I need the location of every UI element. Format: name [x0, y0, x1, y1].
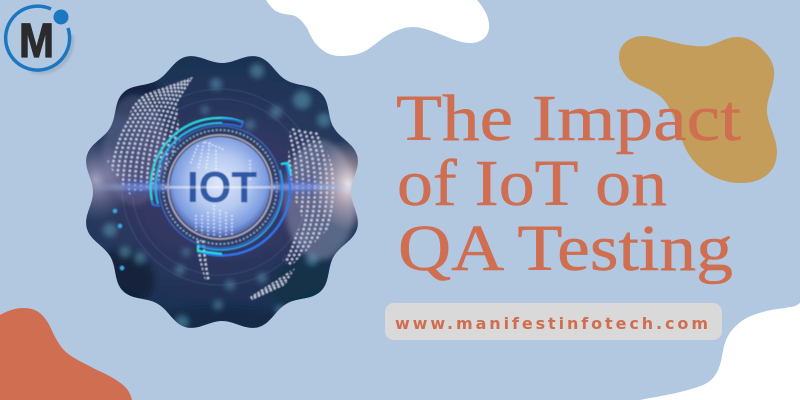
title line 2: of IoT on [397, 147, 667, 220]
website pill [385, 303, 722, 340]
inner rings [159, 126, 281, 248]
website url: www.manifestinfotech.com [395, 314, 708, 333]
core dotted map [190, 142, 250, 240]
faint orbit rings [122, 89, 318, 285]
bokeh lights [103, 64, 331, 329]
badge: IoT globe image [86, 56, 358, 328]
logo letter M: M [19, 15, 54, 68]
logo ring [6, 6, 70, 70]
white blob: bottom right [640, 303, 800, 400]
core sphere [170, 137, 270, 237]
network nodes [113, 209, 124, 270]
badge dark corners [106, 82, 332, 327]
dotted world map [107, 76, 334, 301]
title [396, 82, 741, 285]
horizontal light flare [90, 184, 360, 190]
badge background [86, 56, 358, 328]
flare across core [165, 186, 275, 188]
ochre blob: top right [619, 36, 777, 183]
side glows [316, 142, 358, 228]
logo dot [54, 10, 68, 24]
orange blob: bottom left [0, 308, 132, 400]
logo shadow ring [31, 35, 72, 72]
white blob: top [266, 0, 489, 56]
cyan HUD arcs [151, 118, 291, 255]
pill background [385, 303, 722, 340]
title line 3: QA Testing [398, 212, 733, 285]
logo [6, 6, 72, 72]
IOT lettering: IOT [187, 163, 257, 212]
title line 1: The Impact [396, 82, 741, 155]
